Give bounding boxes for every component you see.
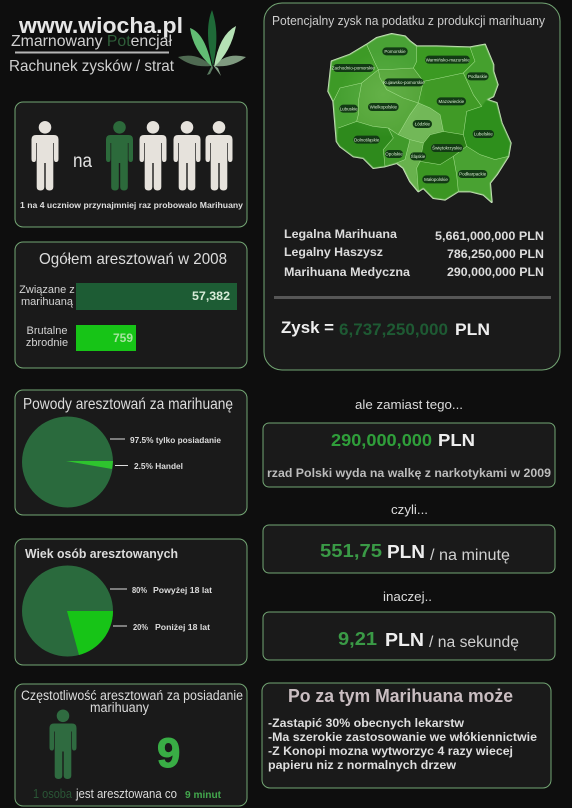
row: medical marijuana: Marihuana Medyczna — [284, 267, 411, 279]
heading: Potencjalny zysk na podatku z produkcji marihuany — [272, 13, 545, 28]
amount: PLN — [385, 629, 424, 650]
legend: over 18 — [110, 586, 212, 595]
pie chart — [22, 566, 113, 656]
panel: students — [15, 102, 247, 227]
bar label: marijuana: Związane z — [19, 284, 75, 296]
legend: over 18: 80% — [132, 586, 147, 595]
bar: marijuana — [76, 283, 237, 310]
map of Poland: Małopolskie — [424, 177, 448, 182]
icon: cannabis leaf — [178, 10, 246, 76]
panel: age of arrested — [15, 539, 247, 665]
amount: 9,21 — [338, 628, 377, 649]
caption: 9 minut — [185, 790, 222, 801]
row: legal marijuana: Legalna Marihuana — [284, 229, 398, 241]
map of Poland: Lubuskie — [340, 106, 358, 111]
bar: marijuana: 57,382 — [192, 289, 230, 303]
list — [268, 716, 537, 772]
panel: tax profit — [264, 3, 560, 370]
map of Poland: Śląskie — [411, 152, 426, 159]
map of Poland: Podkarpackie — [459, 172, 487, 177]
total profit — [281, 318, 490, 339]
text: but instead: ale zamiast tego... — [355, 397, 463, 412]
map of Poland: Opolskie — [385, 152, 403, 157]
row: legal hashish — [284, 247, 544, 261]
amount: 290,000,000 — [331, 430, 432, 450]
panel: other uses — [262, 683, 551, 788]
panel: arrest frequency — [15, 684, 247, 806]
heading: Ogółem aresztowań w 2008 — [39, 251, 227, 268]
total profit: Zysk = — [281, 318, 334, 337]
title line 1: Zmarnowany Potencjał — [11, 33, 172, 50]
title line 2: Rachunek zysków / strat — [9, 58, 175, 75]
list: -Ma szerokie zastosowanie we włókiennictwie — [268, 730, 537, 744]
heading: Po za tym Marihuana może — [288, 686, 513, 706]
panel: total arrests — [15, 242, 247, 368]
caption: jest aresztowana co — [75, 786, 177, 801]
bar: violent crimes — [76, 325, 136, 351]
legend: under 18: Poniżej 18 lat — [155, 623, 210, 632]
panel: arrest reasons — [15, 390, 247, 515]
icon: person 4 — [174, 121, 200, 190]
row: legal hashish: 786,250,000 PLN — [447, 249, 544, 261]
amount: PLN — [438, 430, 475, 450]
pie chart — [22, 416, 113, 508]
row: legal marijuana: 5,661,000,000 PLN — [435, 231, 544, 243]
panel: government spending — [263, 423, 555, 487]
total profit: 6,737,250,000 — [339, 320, 448, 339]
heading: Częstotliwość aresztowań za posiadanie — [21, 688, 243, 703]
row: medical marijuana: 290,000,000 PLN — [447, 267, 544, 279]
map of Poland: Łódzkie — [415, 122, 431, 127]
list: papieru niz z normalnych drzew — [268, 758, 457, 772]
title — [9, 33, 175, 75]
map of Poland: Podlaskie — [468, 74, 488, 79]
amount: 551,75 — [320, 540, 382, 561]
amount — [338, 628, 424, 650]
bar label: violent crimes: zbrodnie — [26, 337, 68, 349]
icon: green person — [106, 121, 133, 190]
text: otherwise: inaczej.. — [383, 589, 432, 604]
panel: per minute — [263, 525, 555, 573]
unit: / na minutę — [430, 547, 510, 564]
bar label: marijuana: marihuaną — [21, 296, 74, 308]
map of Poland: Lubelskie — [474, 132, 493, 137]
icon: person 1 — [32, 121, 58, 190]
amount — [320, 540, 425, 562]
legend: under 18 — [113, 623, 210, 632]
icon: person 5 — [206, 121, 232, 190]
heading: Wiek osób aresztowanych — [25, 547, 178, 561]
map of Poland — [328, 34, 511, 202]
text: that is: czyli... — [391, 502, 428, 517]
legend: possession: 97.5% tylko posiadanie — [130, 435, 221, 445]
map of Poland: Wielkopolskie — [370, 105, 398, 110]
bar label: violent crimes: Brutalne — [27, 325, 67, 337]
panel: per second — [263, 612, 555, 660]
caption — [33, 786, 222, 801]
map of Poland: Kujawsko-pomorskie — [383, 80, 425, 85]
total profit: PLN — [455, 320, 490, 339]
map of Poland: Dolnośląskie — [354, 137, 380, 142]
map of Poland: Świętokrzyskie — [432, 144, 462, 151]
unit: / na sekundę — [429, 634, 519, 651]
map of Poland: Zachodnio-pomorskie — [332, 66, 375, 71]
caption: 1 osoba — [33, 787, 72, 801]
legend: under 18: 20% — [133, 623, 148, 632]
map of Poland: Pomorskie — [384, 49, 406, 54]
heading line 2: marihuany — [90, 700, 149, 715]
icon: person — [50, 710, 76, 779]
amount — [331, 430, 475, 450]
row: legal marijuana — [284, 229, 544, 243]
list: -Zastapić 30% obecnych lekarstw — [268, 716, 465, 730]
big number: 9 — [157, 729, 180, 776]
row: medical marijuana — [284, 267, 544, 279]
caption: 1 na 4 uczniow przynajmniej raz probowalo Marihuany — [20, 200, 243, 210]
amount: PLN — [387, 541, 425, 562]
legend: over 18: Powyżej 18 lat — [153, 586, 212, 595]
icon: person 3 — [140, 121, 166, 190]
description: rzad Polski wyda na walkę z narkotykami w 2009 — [267, 468, 551, 480]
legend: trade: 2.5% Handel — [134, 461, 183, 471]
text: na: na — [73, 151, 92, 172]
list: -Z Konopi mozna wytworzyc 4 razy wiecej — [268, 744, 513, 758]
map of Poland: Mazowieckie — [438, 99, 465, 104]
row: legal hashish: Legalny Haszysz — [284, 247, 383, 259]
map of Poland: Warmińsko-mazurskie — [426, 57, 470, 62]
heading: Powody aresztowań za marihuanę — [23, 396, 233, 413]
watermark: www.wiocha.pl — [18, 13, 183, 38]
bar: violent crimes: 759 — [113, 331, 133, 345]
